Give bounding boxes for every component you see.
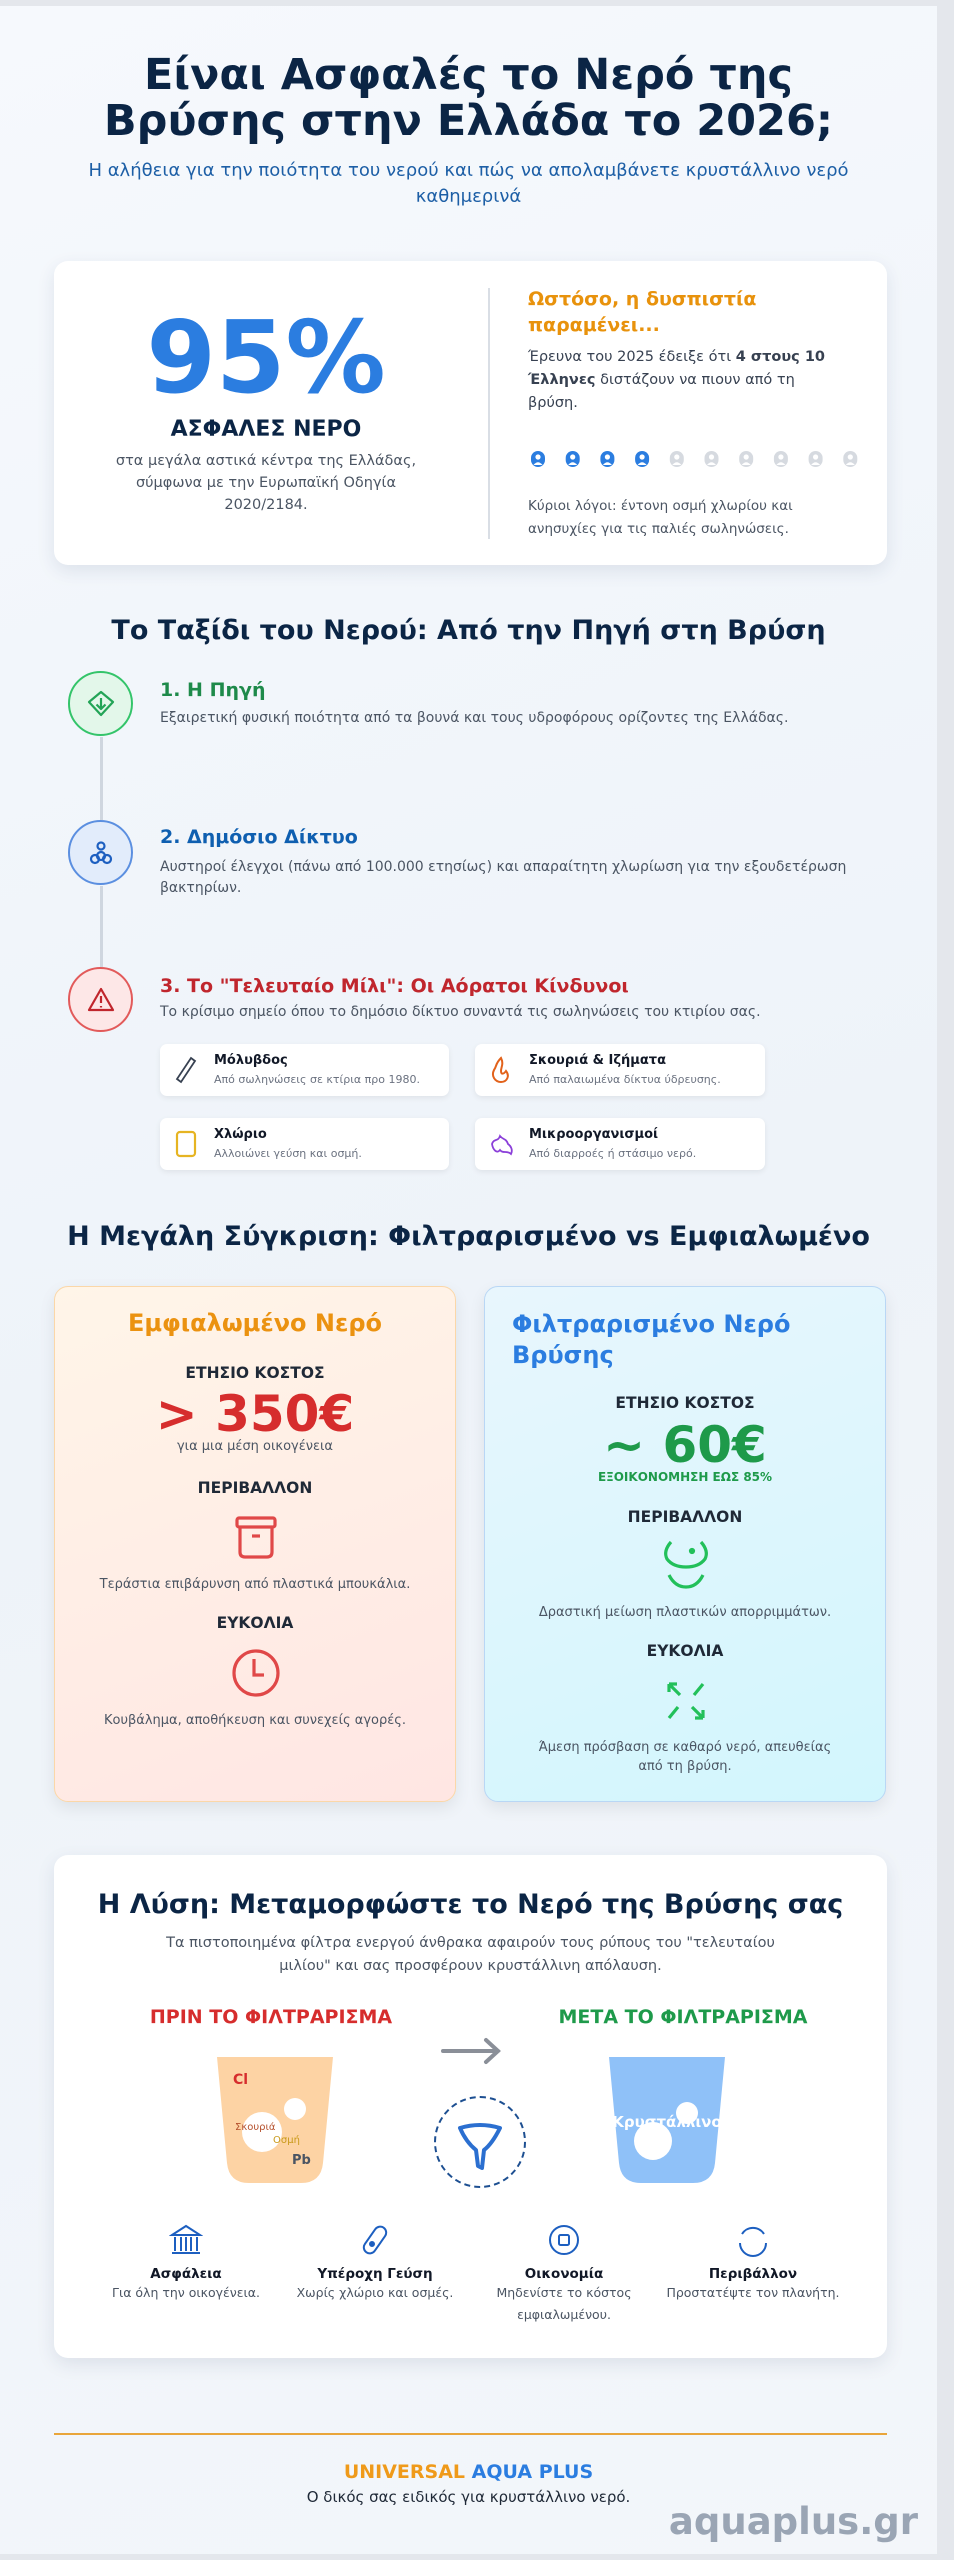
subtitle: Η αλήθεια για την ποιότητα του νερού και πώς να απολαμβάνετε κρυστάλλινο νερό καθημερινά [88, 160, 849, 207]
big stat 95%: 95% [146, 299, 386, 416]
panel: bottled water: Εμφιαλωμένο Νερό [128, 1309, 382, 1337]
stat description: στα μεγάλα αστικά κέντρα της Ελλάδας, σύμφωνα με την Ευρωπαϊκή Οδηγία 2020/2184. [116, 453, 416, 513]
panel: filtered tap water: ΕΥΚΟΛΙΑ [647, 1642, 723, 1660]
label safe water: ΑΣΦΑΛΕΣ ΝΕΡΟ [171, 417, 361, 442]
feature: safety: Ασφάλεια [150, 2266, 222, 2282]
step 1: source [68, 671, 788, 736]
cup before: Pb [292, 2153, 311, 2168]
panel: filtered tap water: ΕΞΟΙΚΟΝΟΜΗΣΗ ΕΩΣ 85% [598, 1470, 772, 1484]
risk card: chlorine: Αλλοιώνει γεύση και οσμή. [214, 1147, 362, 1160]
step 3: last mile: Το κρίσιμο σημείο όπου το δημόσιο δίκτυο συναντά τις σωληνώσεις του κτιρίου σας. [160, 1004, 761, 1020]
icon: bin [235, 1516, 277, 1559]
icon: network [68, 820, 133, 885]
panel: filtered tap water: ΠΕΡΙΒΑΛΛΟΝ [628, 1508, 742, 1526]
panel: filtered tap water: Φιλτραρισμένο Νερό Βρύσης [512, 1310, 790, 1369]
cup after: Κρυστάλλινο [612, 2113, 722, 2131]
website watermark: aquaplus.gr [669, 2500, 918, 2543]
label after: ΜΕΤΑ ΤΟ ΦΙΛΤΡΑΡΙΣΜΑ [558, 2006, 808, 2028]
risk card: microorganisms [475, 1118, 765, 1170]
footer brand: UNIVERSAL AQUA PLUS [344, 2461, 593, 2483]
panel: bottled water: > 350€ [156, 1385, 354, 1443]
icon: filter funnel [434, 2096, 526, 2188]
panel: filtered tap water: ΕΤΗΣΙΟ ΚΟΣΤΟΣ [615, 1394, 755, 1412]
feature: safety [112, 2224, 260, 2300]
title [104, 50, 833, 146]
risk card: chlorine: Χλώριο [214, 1127, 267, 1142]
label before: ΠΡΙΝ ΤΟ ΦΙΛΤΡΑΡΙΣΜΑ [150, 2006, 392, 2028]
feature: safety: Για όλη την οικογένεια. [112, 2285, 260, 2300]
main reasons: Κύριοι λόγοι: έντονη οσμή χλωρίου και ανησυχίες για τις παλιές σωληνώσεις. [528, 498, 793, 537]
arrow [441, 2038, 501, 2064]
people icon row [531, 451, 858, 467]
risk card: microorganisms: Μικροοργανισμοί [529, 1127, 658, 1142]
step 2: public network: 2. Δημόσιο Δίκτυο [160, 826, 358, 848]
survey text: Έρευνα του 2025 έδειξε ότι 4 στους 10 Έλληνες διστάζουν να πιουν από τη βρύση. [528, 349, 825, 411]
panel: bottled water: ΕΤΗΣΙΟ ΚΟΣΤΟΣ [185, 1364, 325, 1382]
cup before: Οσμή [273, 2134, 300, 2146]
feature: taste [297, 2226, 453, 2300]
panel: filtered tap water: Άμεση πρόσβαση σε καθαρό νερό, απευθείας από τη βρύση. [539, 1740, 831, 1774]
panel: filtered tap water: Δραστική μείωση πλαστικών απορριμμάτων. [539, 1605, 831, 1620]
feature: economy [496, 2225, 632, 2322]
step 3: last mile: 3. Το "Τελευταίο Μίλι": Οι Αόρατοι Κίνδυνοι [160, 975, 629, 997]
cup before: Cl [233, 2072, 248, 2088]
panel: safety stats [54, 261, 887, 565]
panel: bottled water: Κουβάλημα, αποθήκευση και συνεχείς αγορές. [104, 1713, 406, 1728]
panel: bottled water [54, 1286, 456, 1802]
solution text: Τα πιστοποιημένα φίλτρα ενεργού άνθρακα αφαιρούν τους ρύπους του "τελευταίου μιλίου" και σας προσφέρουν κρυστάλλινη απόλαυση. [166, 1935, 775, 1974]
heading: comparison: Η Μεγάλη Σύγκριση: Φιλτραρισμένο vs Εμφιαλωμένο [67, 1221, 870, 1252]
icon: source [68, 671, 133, 736]
panel: filtered tap water: ~ 60€ [603, 1416, 767, 1474]
risk card: chlorine [160, 1118, 449, 1170]
feature: economy: Οικονομία [525, 2266, 603, 2282]
panel: bottled water: ΕΥΚΟΛΙΑ [217, 1614, 293, 1632]
risk card: rust: Σκουριά & Ιζήματα [529, 1053, 666, 1068]
heading: solution: Η Λύση: Μεταμορφώστε το Νερό της Βρύσης σας [98, 1889, 843, 1920]
feature: environment: Προστατέψτε τον πλανήτη. [666, 2285, 840, 2300]
feature: environment: Περιβάλλον [709, 2266, 797, 2282]
heading: water journey: Το Ταξίδι του Νερού: Από την Πηγή στη Βρύση [111, 615, 826, 646]
panel: bottled water: Τεράστια επιβάρυνση από πλαστικά μπουκάλια. [100, 1577, 410, 1592]
step 1: source: 1. Η Πηγή [160, 679, 265, 701]
risk card: lead: Μόλυβδος [214, 1053, 288, 1068]
feature: economy: Μηδενίστε το κόστος εμφιαλωμένου. [496, 2285, 632, 2322]
icon: clock [232, 1649, 280, 1697]
risk card: rust: Από παλαιωμένα δίκτυα ύδρευσης. [529, 1073, 721, 1086]
distrust heading: Ωστόσο, η δυσπιστία παραμένει... [528, 288, 756, 336]
cup after [609, 2057, 725, 2183]
icon: warning [68, 967, 133, 1032]
panel: filtered tap water [484, 1286, 886, 1802]
panel: bottled water: ΠΕΡΙΒΑΛΛΟΝ [198, 1479, 312, 1497]
risk card: microorganisms: Από διαρροές ή στάσιμο νερό. [529, 1147, 696, 1160]
risk card: rust [475, 1044, 765, 1096]
risk card: lead [160, 1044, 449, 1096]
panel: solution [54, 1855, 887, 2358]
step 1: source: Εξαιρετική φυσική ποιότητα από τα βουνά και τους υδροφόρους ορίζοντες της Ελλάδας. [160, 710, 788, 726]
icon: recycle [664, 1540, 708, 1589]
feature: environment [666, 2226, 840, 2300]
panel: bottled water: για μια μέση οικογένεια [177, 1439, 333, 1454]
icon: arrows [667, 1682, 705, 1720]
risk card: lead: Από σωληνώσεις σε κτίρια προ 1980. [214, 1073, 420, 1086]
feature: taste: Χωρίς χλώριο και οσμές. [297, 2285, 453, 2300]
cup before: Σκουριά [235, 2121, 276, 2133]
title: Βρύσης στην Ελλάδα το 2026; [104, 96, 833, 146]
step 3: last mile [68, 967, 761, 1032]
step 2: public network: Αυστηροί έλεγχοι (πάνω από 100.000 ετησίως) και απαραίτητη χλωρίωση για την εξουδετέρωση βακτηρίων. [160, 859, 846, 896]
step 2: public network [68, 820, 846, 896]
feature: taste: Υπέροχη Γεύση [317, 2266, 433, 2282]
footer tagline: Ο δικός σας ειδικός για κρυστάλλινο νερό. [307, 2488, 630, 2506]
cup before [217, 2057, 333, 2183]
title: Είναι Ασφαλές το Νερό της [144, 50, 793, 100]
